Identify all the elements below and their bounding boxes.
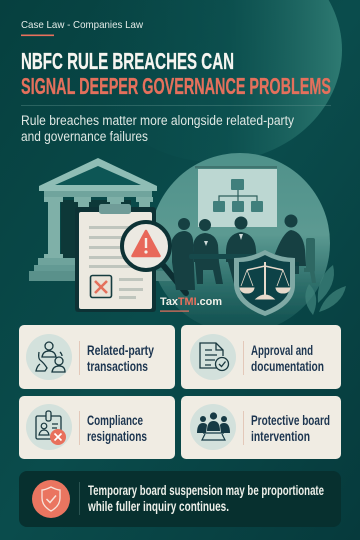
- label: [87, 343, 154, 374]
- hero illustration: [29, 153, 346, 333]
- subtitle: [21, 113, 294, 144]
- icon: clipboard: [75, 204, 156, 312]
- card: related-party transactions: [19, 325, 175, 389]
- card: approval and documentation: [181, 325, 341, 389]
- callout text: while fuller inquiry continues.: [87, 499, 229, 514]
- whiteboard with org chart: [195, 166, 277, 227]
- icon: related parties: [26, 334, 72, 380]
- header: [21, 19, 331, 144]
- subtitle: and governance failures: [21, 129, 148, 144]
- accent rule: [21, 34, 54, 36]
- label: documentation: [251, 359, 324, 374]
- label: [87, 413, 147, 444]
- label: Protective board: [251, 413, 330, 428]
- icon: ID badge with cross: [26, 404, 72, 450]
- label: [251, 413, 330, 444]
- icon: justice shield: [234, 250, 295, 316]
- icon: magnifier with warning: [122, 222, 186, 293]
- backdrop disc: [150, 153, 330, 333]
- title: [21, 48, 331, 99]
- card: compliance resignations: [19, 396, 175, 459]
- callout text: [87, 483, 324, 514]
- icon: leaves: [305, 265, 346, 315]
- icon: boardroom: [190, 404, 236, 450]
- label: Compliance: [87, 413, 143, 428]
- label: [251, 343, 324, 374]
- label: resignations: [87, 429, 147, 444]
- icon: document check: [190, 334, 236, 380]
- brand: TaxTMI.com: TaxTMI.com: [160, 296, 222, 308]
- meeting silhouettes: [172, 214, 316, 290]
- icon: failed checkbox: [90, 276, 112, 298]
- category label: Case Law - Companies Law: [21, 19, 143, 31]
- callout bar: [19, 471, 341, 527]
- subtitle: Rule breaches matter more alongside related-party: [21, 113, 294, 128]
- label: transactions: [87, 359, 148, 374]
- label: Related-party: [87, 343, 154, 358]
- icon: court building: [29, 158, 176, 281]
- title: NBFC RULE BREACHES CAN: [21, 48, 234, 74]
- icon: shield check: [32, 480, 70, 518]
- label: Approval and: [251, 343, 313, 358]
- label: intervention: [251, 429, 310, 444]
- card: protective board intervention: [181, 396, 341, 459]
